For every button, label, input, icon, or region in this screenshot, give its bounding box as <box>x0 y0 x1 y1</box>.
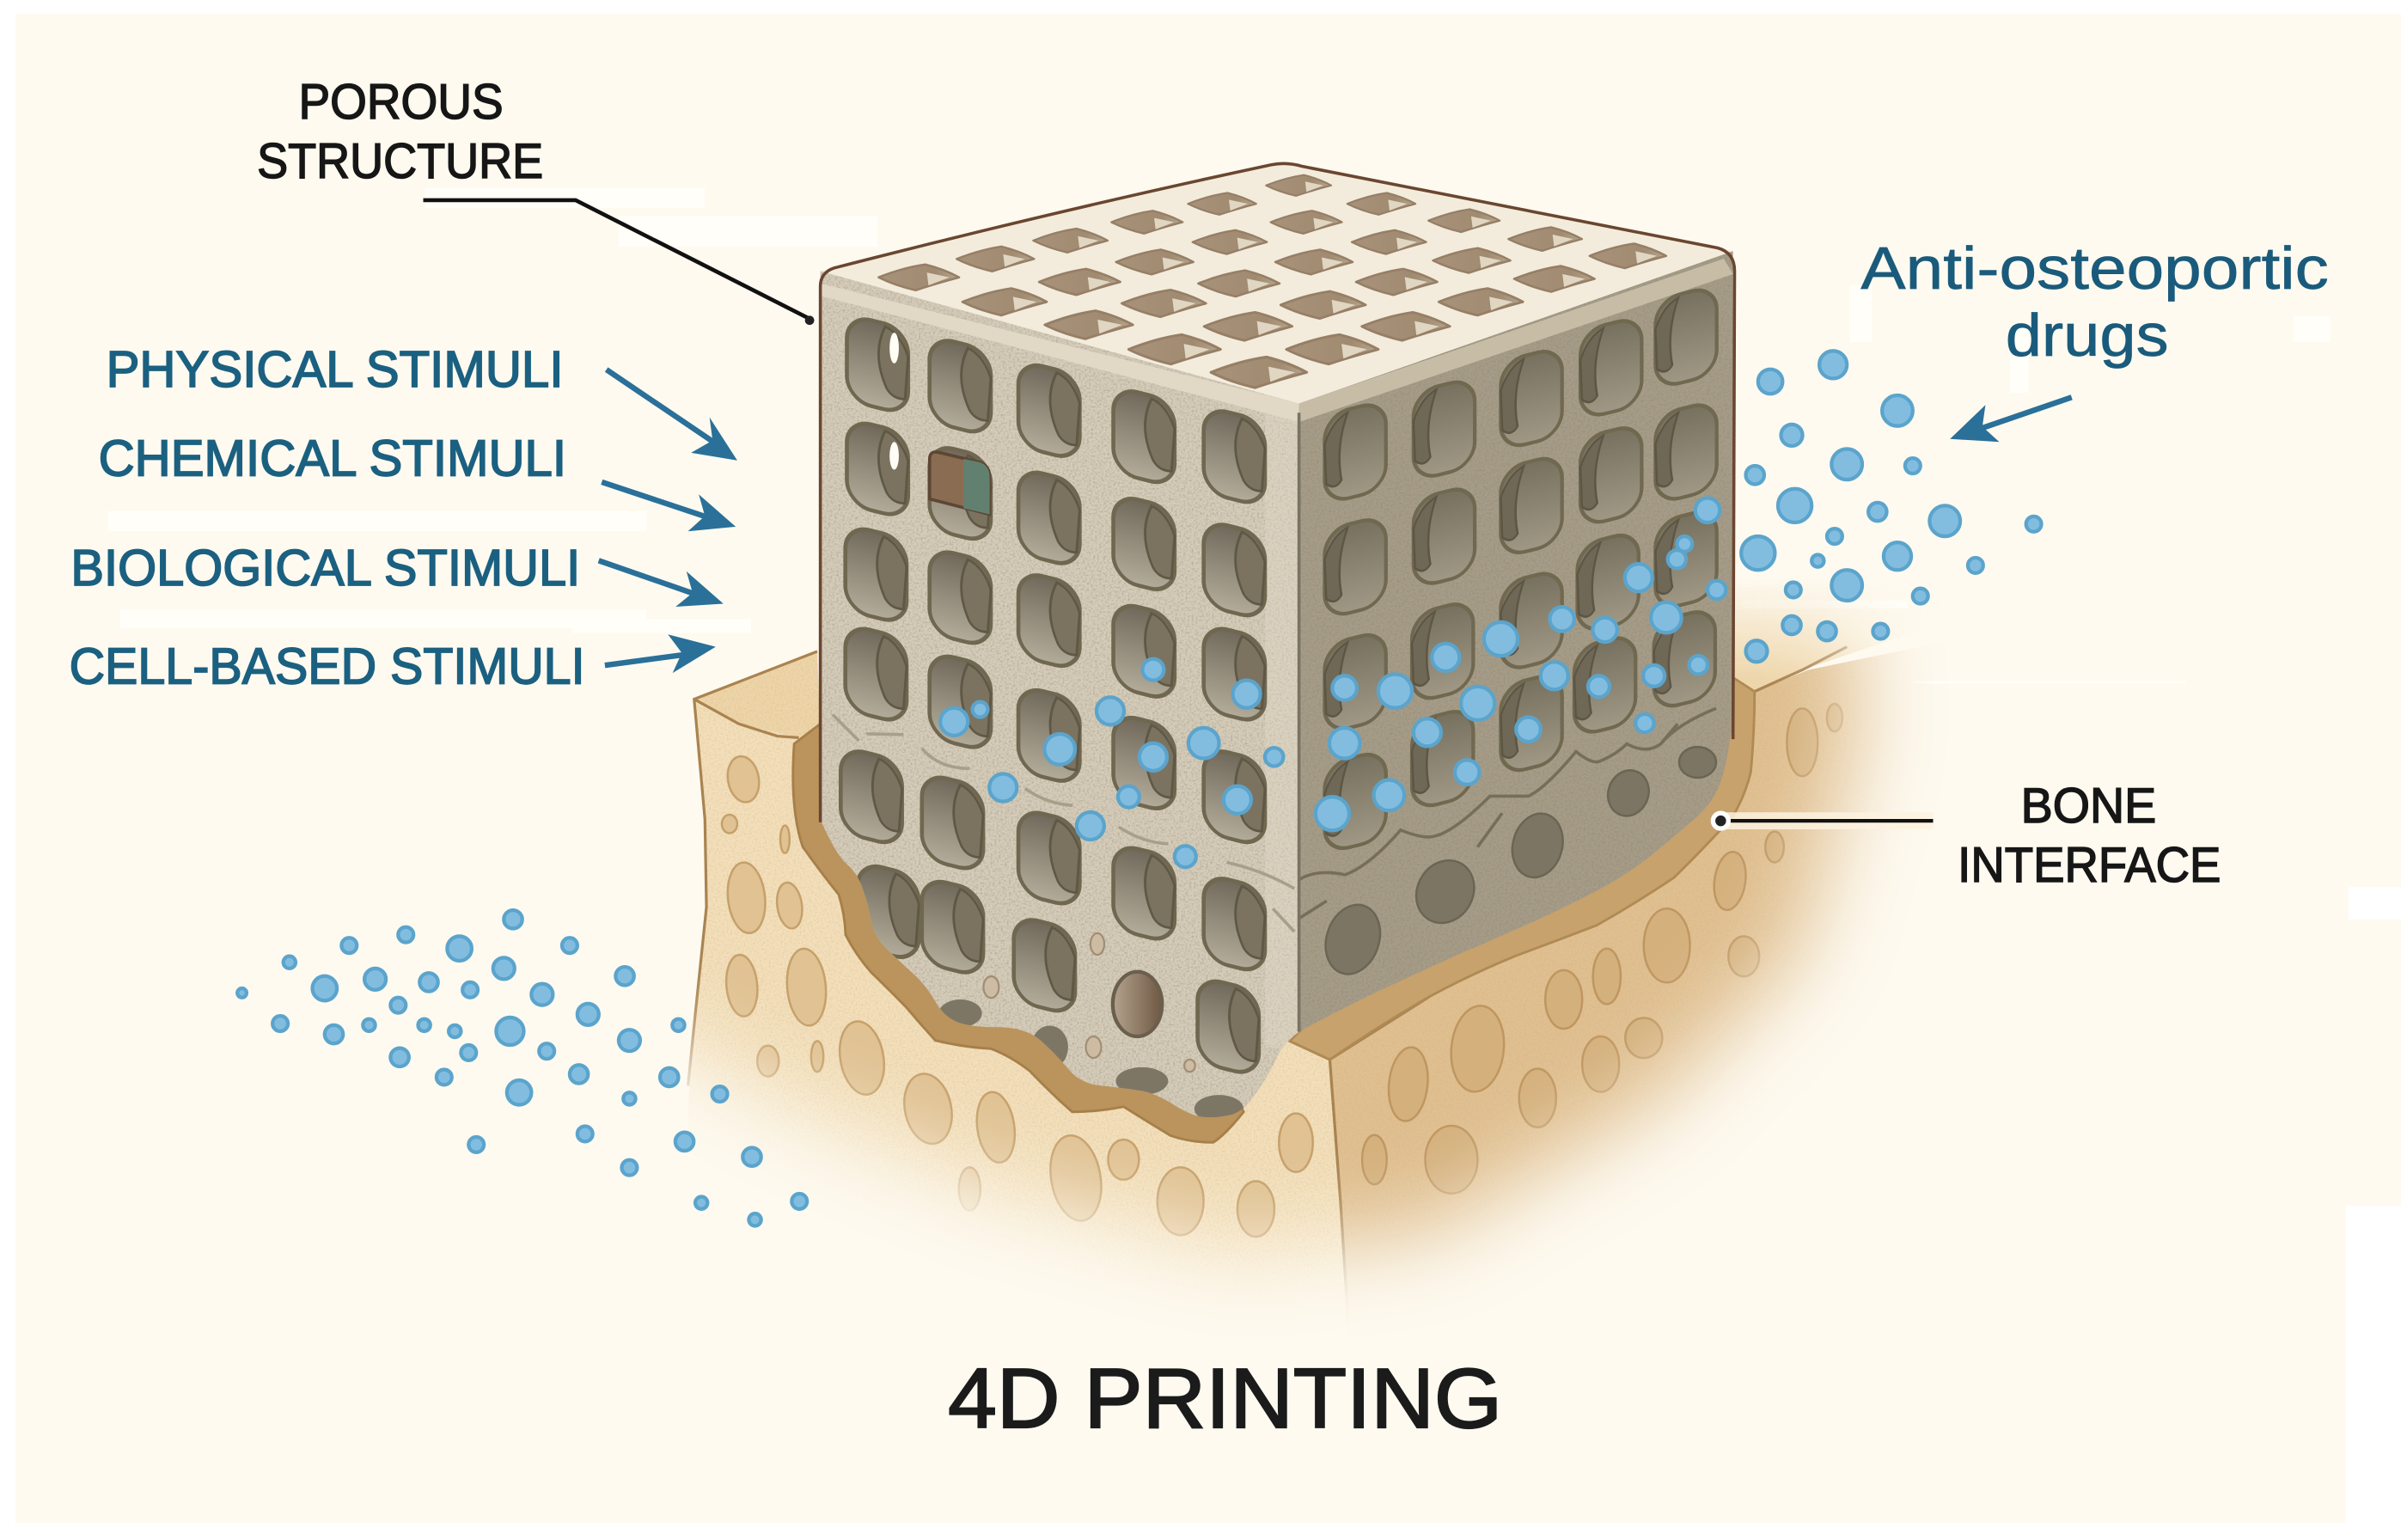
left face pores <box>840 315 1265 1077</box>
label: porous structure: STRUCTURE <box>257 134 543 189</box>
cube right face <box>1292 247 1739 1048</box>
leader line: bone interface <box>1713 813 1934 828</box>
cube left face <box>808 262 1316 1140</box>
label: cell-based stimuli: CELL-BASED STIMULI <box>70 638 585 695</box>
arrow: physical stimuli <box>607 370 737 461</box>
bone right face <box>1331 650 1911 1299</box>
top face pores <box>878 175 1666 388</box>
leader line: porous structure <box>424 200 814 325</box>
bone tissue block <box>687 589 1911 1310</box>
cube outline <box>821 163 1734 822</box>
small holes <box>983 933 1195 1072</box>
label: porous structure <box>257 75 543 189</box>
lower dark pores <box>1317 747 1716 981</box>
bone upper right surface <box>1734 589 1887 690</box>
cube top face <box>821 163 1733 404</box>
rim, right side <box>1290 677 1755 1060</box>
bone left face <box>689 701 1344 1301</box>
arrow: chemical stimuli <box>602 482 736 531</box>
right face pores <box>1324 285 1717 853</box>
drug particles on scaffold and right cloud <box>940 351 2042 867</box>
pore highlights <box>889 333 899 470</box>
drug particles, left cloud <box>237 910 807 1225</box>
open bottom pore <box>1113 972 1162 1036</box>
title: 4D PRINTING <box>948 1351 1502 1445</box>
bone top-left surface <box>694 651 821 737</box>
label: anti-osteoportic drugs: Anti-osteoportic <box>1860 235 2329 302</box>
label: biological stimuli: BIOLOGICAL STIMULI <box>70 539 580 596</box>
bone outline <box>688 647 1847 1324</box>
cube front edge <box>1298 412 1300 1032</box>
label: bone interface <box>1958 779 2221 893</box>
waves <box>1298 708 1716 920</box>
label: chemical stimuli: CHEMICAL STIMULI <box>99 430 566 487</box>
open window pore <box>930 452 990 515</box>
arrow: biological stimuli <box>599 560 724 607</box>
cracks <box>833 714 1294 932</box>
label: porous structure: POROUS <box>298 75 504 130</box>
label: anti-osteoportic drugs: drugs <box>2006 302 2169 369</box>
rim, left side <box>793 724 1243 1142</box>
label: bone interface: BONE <box>2021 779 2156 834</box>
bone interface rim <box>793 677 1755 1142</box>
top face left bevel <box>821 284 1299 422</box>
top face right bevel <box>1299 259 1733 422</box>
bone pores, left face <box>722 754 1313 1237</box>
label: physical stimuli: PHYSICAL STIMULI <box>107 340 564 398</box>
bone pores, right face <box>1362 704 1842 1194</box>
label: anti-osteoportic drugs <box>1860 235 2329 369</box>
porous scaffold cube <box>808 163 1739 1140</box>
front edge highlight <box>1265 385 1299 1048</box>
arrow: cell-based stimuli <box>605 634 716 673</box>
bottom broken pores <box>939 999 1243 1122</box>
label: bone interface: INTERFACE <box>1958 838 2221 893</box>
arrow: drugs <box>1950 397 2072 442</box>
